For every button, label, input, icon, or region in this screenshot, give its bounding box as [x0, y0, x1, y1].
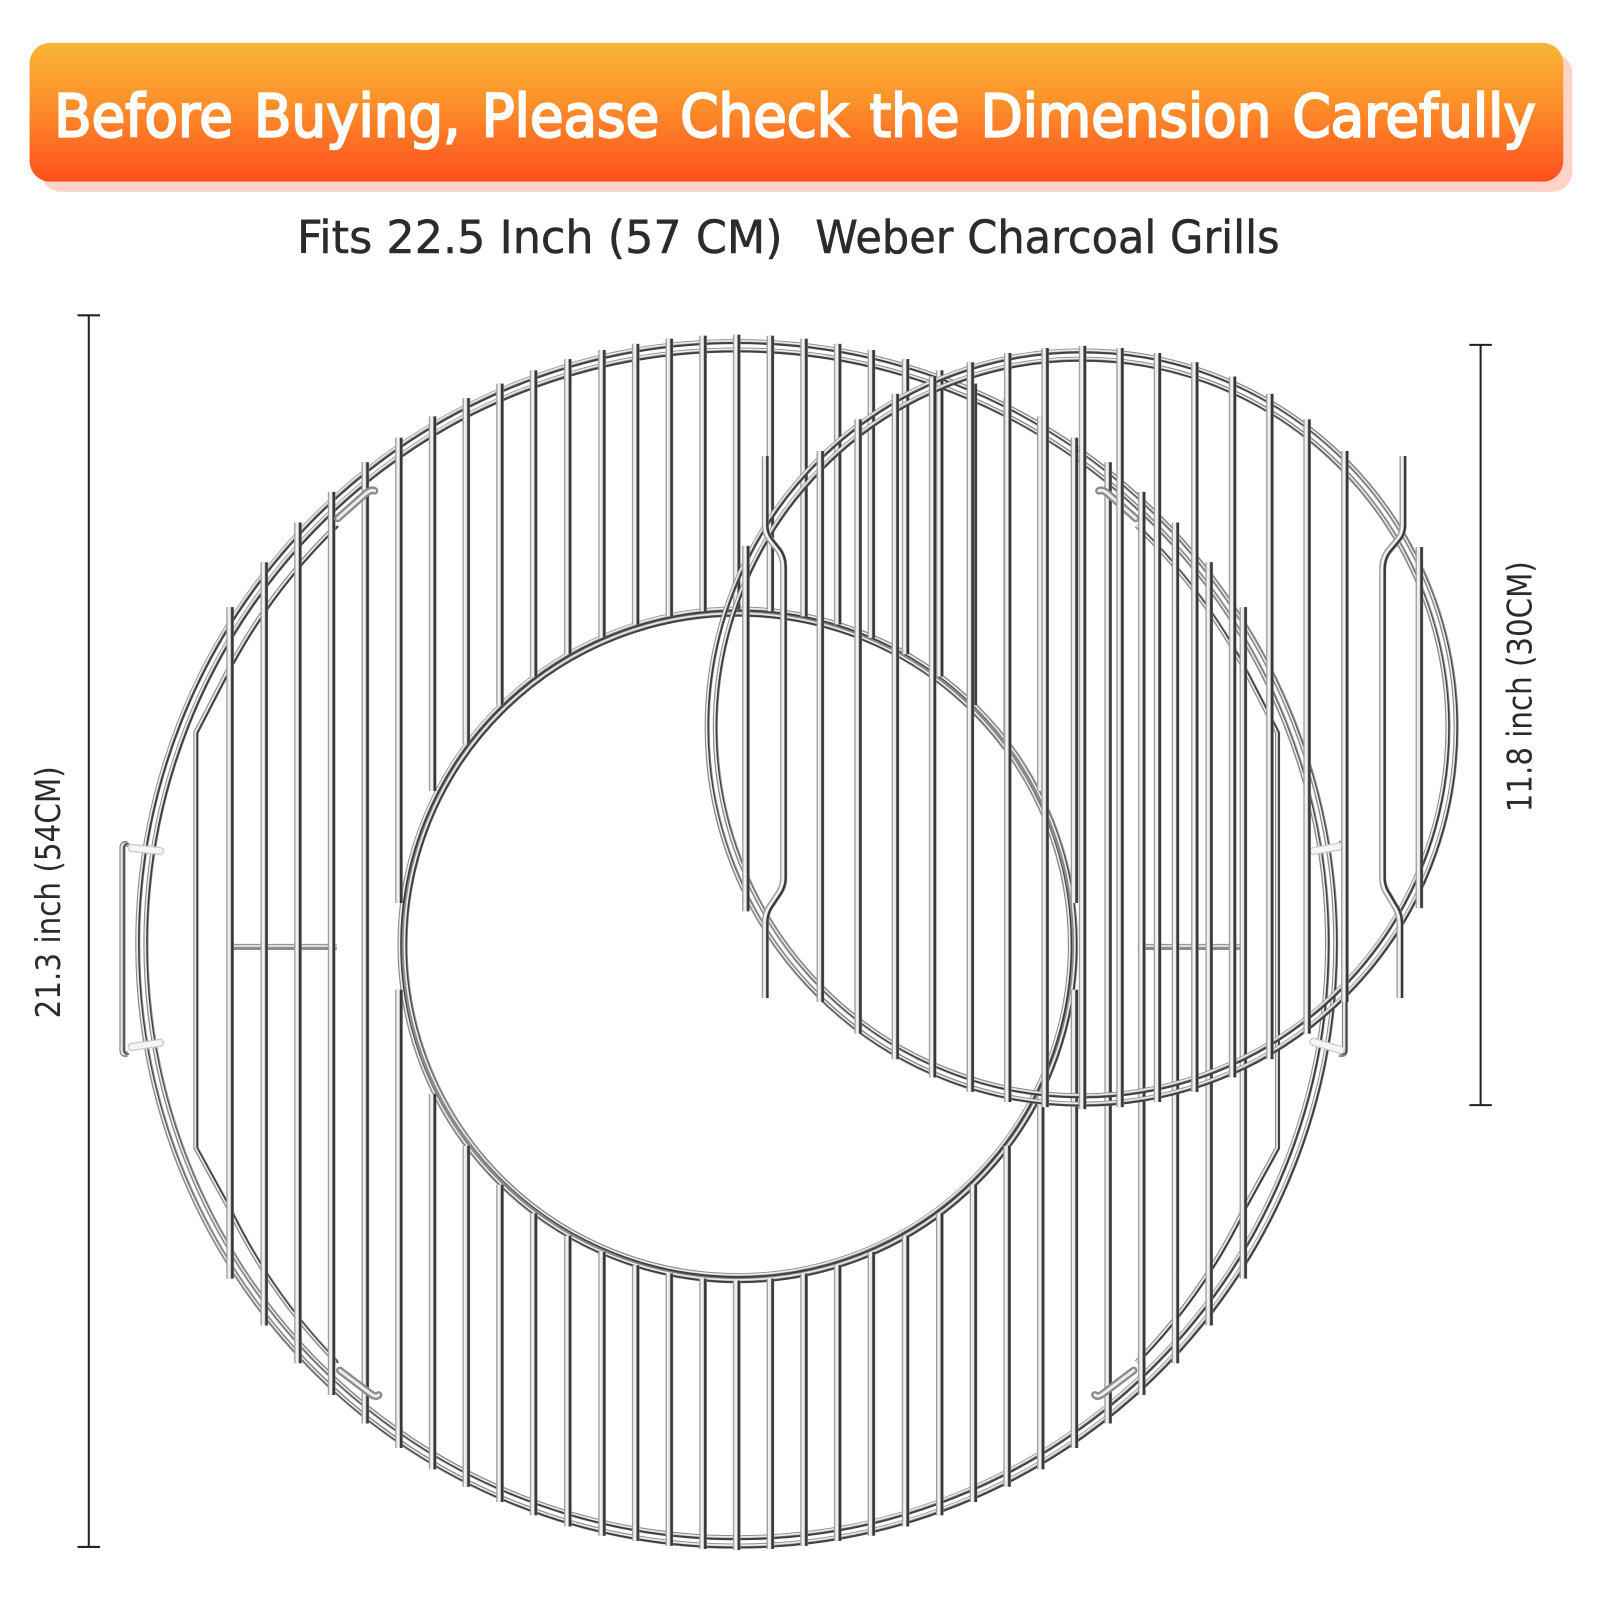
large grate side handles [122, 844, 1347, 1054]
dimension line: large grate height [78, 315, 100, 1547]
large grate inner support wire [195, 525, 1279, 1363]
small grate vertical bars [745, 346, 1422, 1109]
dimension label: 11.8 inch: 11.8 inch (30CM) [1501, 561, 1540, 812]
banner shadow [41, 53, 1572, 192]
small grate rings [707, 350, 1457, 1106]
small centre grate insert [707, 346, 1457, 1109]
subtitle: Fits 22.5 Inch (57 CM) [297, 211, 783, 264]
large hinged grate [122, 335, 1347, 1550]
banner [30, 43, 1572, 192]
large grate wire hooks [338, 490, 1136, 1396]
large grate rings [137, 341, 1337, 1548]
large grate centre cross bars [233, 946, 1243, 947]
banner background [30, 43, 1563, 182]
dimension label: 21.3 inch: 21.3 inch (54CM) [29, 766, 68, 1018]
large grate vertical bars [229, 335, 1246, 1550]
subtitle: Weber Charcoal Grills [815, 211, 1280, 264]
large grate handle pegs [132, 846, 1343, 1050]
small grate handles [764, 456, 1405, 998]
dimension line: small grate height [1469, 345, 1492, 1105]
subtitle [297, 211, 1280, 264]
